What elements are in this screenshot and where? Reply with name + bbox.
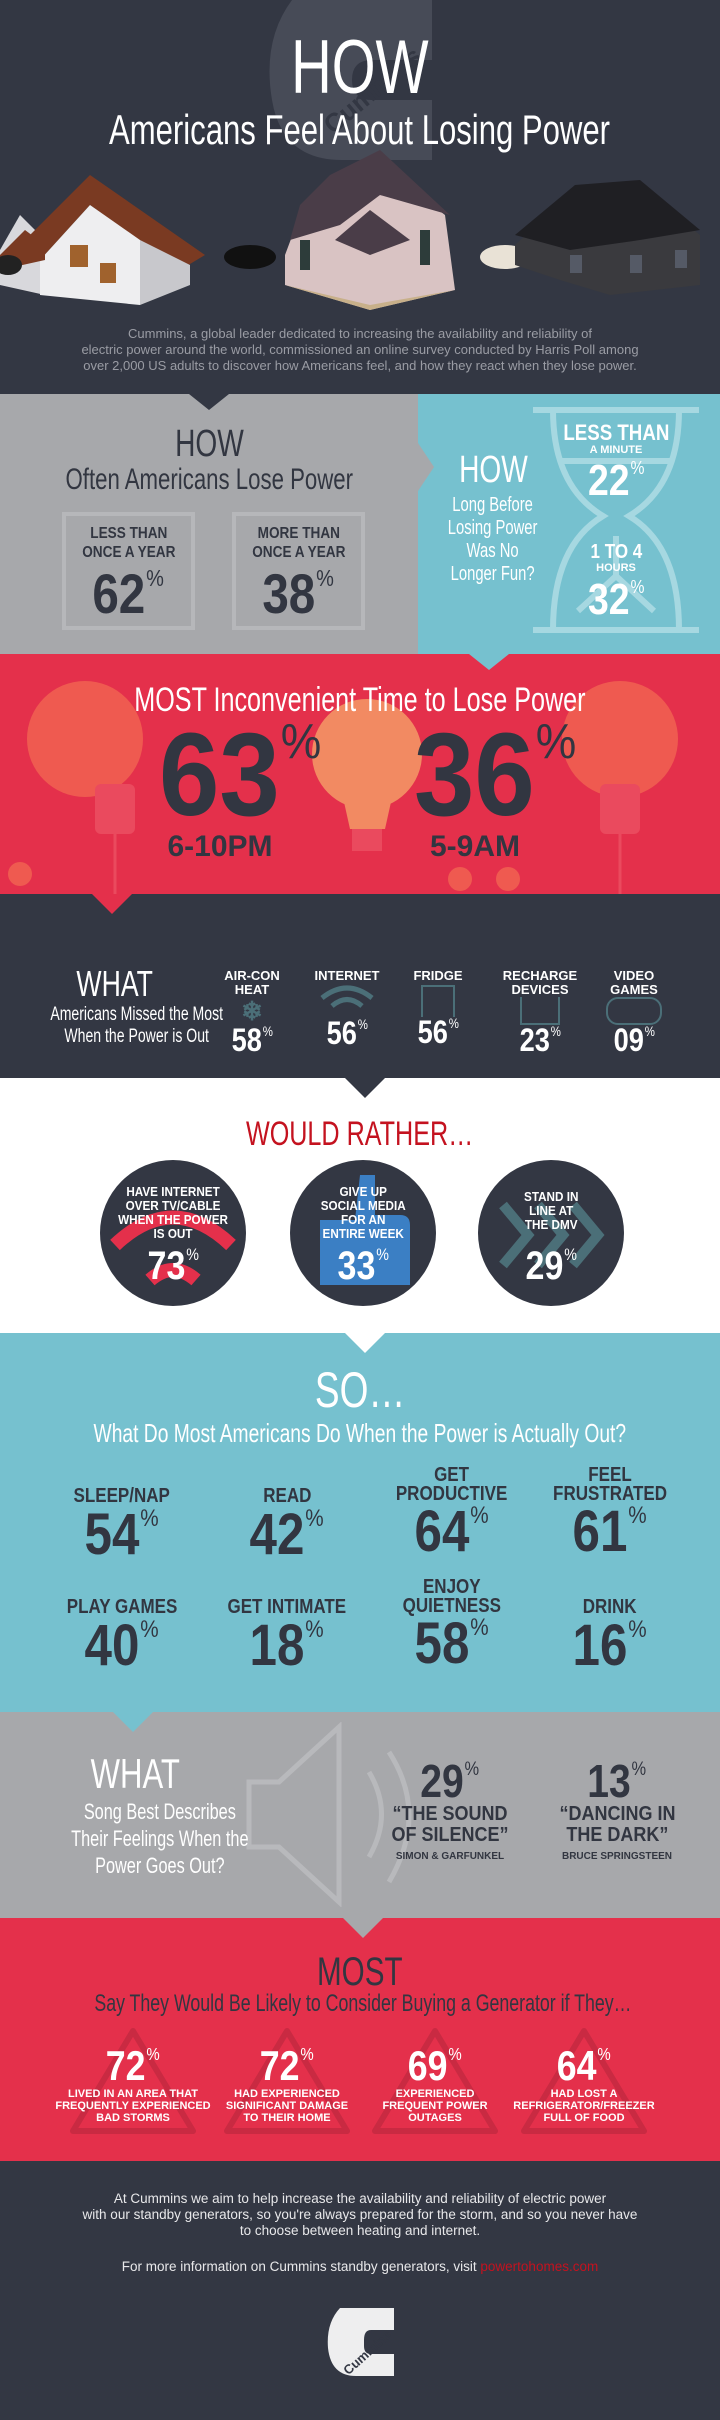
question text: Long Before xyxy=(453,494,533,516)
stat: sleep/nap: SLEEP/NAP xyxy=(74,1485,170,1507)
calendar: less than once a year: ONCE A YEAR xyxy=(82,544,175,561)
stat: get intimate: 18% xyxy=(250,1613,324,1678)
stat: read: READ xyxy=(263,1485,311,1507)
stat: sleep/nap: 54% xyxy=(85,1502,159,1567)
closing paragraph: with our standby generators, so you're always prepared for the storm, and so you never have xyxy=(83,2207,637,2222)
stat: play games: PLAY GAMES xyxy=(67,1596,177,1618)
stat: feel frustrated xyxy=(553,1464,667,1564)
item: video games xyxy=(606,968,662,1058)
subheading: Say They Would Be Likely to Consider Buying a Generator if They… xyxy=(94,1990,631,2017)
subheading: Americans Missed the Most xyxy=(50,1004,223,1025)
circle: stand in line at dmv: LINE AT xyxy=(529,1203,573,1218)
question text: Was No xyxy=(467,540,519,562)
calendar: more than once a year xyxy=(232,512,365,630)
panel: would rather xyxy=(0,1078,720,1333)
question text: Their Feelings When the xyxy=(71,1826,249,1851)
arrow: gray into red xyxy=(343,1918,383,1938)
item: fridge: 56% xyxy=(417,1014,459,1050)
warning triangles xyxy=(0,2026,720,2136)
arrow: teal into red xyxy=(469,654,509,670)
calendar: more than once a year: MORE THAN xyxy=(257,525,340,542)
circle: give up social media: SOCIAL MEDIA xyxy=(321,1198,405,1213)
calendar: more than once a year: 38% xyxy=(263,562,334,625)
item: recharge devices xyxy=(503,968,577,1058)
illustration: houses and cars xyxy=(0,150,700,310)
heading: SO… xyxy=(315,1362,405,1418)
stat: frequent outages: FREQUENT POWER xyxy=(382,2100,488,2112)
panel: most inconvenient time xyxy=(0,654,720,894)
stat: bad storms: 72% xyxy=(106,2042,160,2089)
question text: Power Goes Out? xyxy=(95,1853,225,1878)
circle: internet over tv: IS OUT xyxy=(153,1226,193,1241)
row 1 stats xyxy=(74,1464,667,1567)
circle: give up social media: ENTIRE WEEK xyxy=(322,1226,404,1241)
icon: cummins logo xyxy=(326,2308,398,2378)
stat: get intimate: GET INTIMATE xyxy=(228,1596,346,1618)
item: recharge devices: DEVICES xyxy=(511,982,569,997)
panel: generator xyxy=(0,1918,720,2161)
question text: Longer Fun? xyxy=(451,563,535,585)
item: air-con heat: AIR-CON xyxy=(224,968,280,983)
stat: 1 to 4 hours xyxy=(588,541,644,624)
stat: enjoy quietness: ENJOY xyxy=(423,1576,481,1598)
stat: 1 to 4 hours: HOURS xyxy=(596,562,636,574)
subheading: What Do Most Americans Do When the Power is Actually Out? xyxy=(94,1418,626,1448)
stat: bad storms: LIVED IN AN AREA THAT xyxy=(68,2088,198,2100)
circle: stand in line at dmv: STAND IN xyxy=(524,1189,578,1204)
item: internet: INTERNET xyxy=(314,968,380,983)
stat: frequent outages xyxy=(355,2046,515,2124)
stat: damage to home: 72% xyxy=(260,2042,314,2089)
item: fridge xyxy=(413,968,463,1050)
stat: feel frustrated: 61% xyxy=(573,1499,647,1564)
question text: Losing Power xyxy=(448,517,538,539)
circle: stand in line at dmv xyxy=(478,1160,624,1306)
stat: get intimate xyxy=(228,1596,346,1678)
circle: give up social media xyxy=(290,1160,436,1306)
item: video games: GAMES xyxy=(610,982,658,997)
stat: play games xyxy=(67,1596,177,1678)
stat: 36% 5-9am: 36% xyxy=(414,709,576,841)
stat: play games: 40% xyxy=(85,1613,159,1678)
item: air-con heat xyxy=(224,968,280,1058)
stat: bad storms xyxy=(53,2046,213,2124)
circle: internet over tv: WHEN THE POWER xyxy=(118,1212,228,1227)
subheading: Often Americans Lose Power xyxy=(65,463,353,496)
calendar: less than once a year: 62% xyxy=(93,562,164,625)
stat: dancing in the dark: 13% xyxy=(588,1755,646,1807)
circle: internet over tv: 73% xyxy=(147,1244,199,1288)
icon: speaker xyxy=(246,1722,412,1907)
circle: internet over tv xyxy=(100,1160,246,1306)
calendar: less than once a year xyxy=(62,512,195,630)
intro paragraph xyxy=(81,326,639,373)
stat: damage to home: SIGNIFICANT DAMAGE xyxy=(226,2100,348,2112)
stat: lost food: HAD LOST A xyxy=(551,2088,617,2100)
item: air-con heat: 58% xyxy=(231,1022,273,1058)
stat: damage to home: TO THEIR HOME xyxy=(243,2112,331,2124)
heading: MOST Inconvenient Time to Lose Power xyxy=(134,681,586,719)
item: internet: 56% xyxy=(326,1015,368,1051)
stat: drink: 16% xyxy=(573,1613,647,1678)
stat: get productive: GET xyxy=(435,1464,469,1486)
stat: bad storms: BAD STORMS xyxy=(96,2112,170,2124)
footer xyxy=(0,2161,720,2420)
circle: give up social media: GIVE UP xyxy=(339,1184,387,1199)
stat: less than a minute: 22% xyxy=(588,456,644,505)
question text xyxy=(71,1799,249,1878)
stat: lost food: REFRIGERATOR/FREEZER xyxy=(513,2100,655,2112)
heading: WHAT xyxy=(77,963,153,1004)
stat: lost food xyxy=(504,2046,664,2124)
title: HOW xyxy=(291,25,429,110)
arrow: red into dark xyxy=(92,894,132,914)
circle: internet over tv: HAVE INTERNET xyxy=(126,1184,220,1199)
heading: MOST xyxy=(317,1950,403,1994)
item: internet xyxy=(314,968,380,1051)
item: air-con heat: HEAT xyxy=(235,982,269,997)
stat: dancing in the dark xyxy=(527,1760,707,1864)
icon: faded cummins logo watermark xyxy=(270,0,432,160)
stat: enjoy quietness: QUIETNESS xyxy=(403,1595,501,1617)
icon: cummins logo: Cummins xyxy=(340,2327,394,2378)
intro paragraph: electric power around the world, commissioned an online survey conducted by Harris Poll among xyxy=(81,342,639,357)
closing paragraph xyxy=(40,2191,680,2239)
stat: get productive: PRODUCTIVE xyxy=(396,1483,508,1505)
circle: stand in line at dmv: 29% xyxy=(525,1244,577,1288)
stat: lost food: FULL OF FOOD xyxy=(543,2112,625,2124)
stat: 1 to 4 hours: 32% xyxy=(588,575,644,624)
stat: frequent outages: 69% xyxy=(408,2042,462,2089)
arrow: teal into gray xyxy=(113,1712,153,1732)
row 2 stats xyxy=(67,1576,647,1678)
stat: sound of silence: “THE SOUND xyxy=(392,1803,508,1825)
stat: sound of silence: OF SILENCE” xyxy=(391,1824,508,1846)
stat: 36% 5-9am: 5-9AM xyxy=(430,830,520,863)
item: video games: VIDEO xyxy=(614,968,654,983)
subheading: When the Power is Out xyxy=(64,1026,209,1047)
stat: feel frustrated: FEEL xyxy=(588,1464,632,1486)
more info line: For more information on Cummins standby generators, visit powertohomes.com xyxy=(122,2259,598,2274)
stat: damage to home: HAD EXPERIENCED xyxy=(234,2088,340,2100)
stat: lost food: 64% xyxy=(557,2042,611,2089)
stat: dancing in the dark: “DANCING IN xyxy=(559,1803,675,1825)
arrow: dark into white xyxy=(345,1078,385,1098)
circle: give up social media: 33% xyxy=(337,1244,389,1288)
stat: frequent outages: OUTAGES xyxy=(408,2112,462,2124)
closing paragraph: to choose between heating and internet. xyxy=(240,2223,480,2238)
stat: sleep/nap xyxy=(74,1485,170,1567)
icon: hourglass xyxy=(533,407,699,633)
stat: get productive: 64% xyxy=(415,1499,489,1564)
stat: sound of silence: SIMON & GARFUNKEL xyxy=(396,1851,504,1862)
stat: less than a minute: A MINUTE xyxy=(590,444,642,456)
calendar: more than once a year: ONCE A YEAR xyxy=(252,544,345,561)
item: video games: 09% xyxy=(613,1022,655,1058)
circle: give up social media: FOR AN xyxy=(341,1212,385,1227)
item: recharge devices: RECHARGE xyxy=(503,968,577,983)
panel: how often xyxy=(0,394,418,654)
circle: internet over tv: OVER TV/CABLE xyxy=(126,1198,220,1213)
subtitle: Americans Feel About Losing Power xyxy=(109,106,611,153)
stat: read: 42% xyxy=(250,1502,324,1567)
question text: Song Best Describes xyxy=(84,1799,236,1824)
circle: stand in line at dmv: THE DMV xyxy=(525,1217,577,1232)
heading: HOW xyxy=(175,423,243,465)
subheading xyxy=(50,1004,223,1047)
calendar: less than once a year: LESS THAN xyxy=(90,525,167,542)
stat: enjoy quietness xyxy=(403,1576,501,1676)
intro paragraph: over 2,000 US adults to discover how Americans feel, and how they react when they lose power. xyxy=(83,358,637,373)
stat: damage to home xyxy=(207,2046,367,2124)
item: air-con heat: ❄ xyxy=(241,996,263,1026)
header section xyxy=(0,0,720,394)
arrow: dark into gray xyxy=(189,394,229,410)
stat: less than a minute: LESS THAN xyxy=(563,420,669,445)
stat: get productive xyxy=(396,1464,508,1564)
arrow: gray into teal xyxy=(418,443,434,491)
stat: sound of silence xyxy=(391,1755,508,1862)
item: recharge devices: 23% xyxy=(519,1022,561,1058)
stat: 63% 6-10pm: 6-10PM xyxy=(167,830,273,863)
background decorations: bulbs and plugs xyxy=(8,681,678,894)
icon: faded cummins logo watermark: Cummins xyxy=(318,41,428,140)
heading: HOW xyxy=(459,449,527,491)
closing paragraph: At Cummins we aim to help increase the availability and reliability of electric power xyxy=(114,2191,606,2206)
stat: frequent outages: EXPERIENCED xyxy=(396,2088,474,2100)
stat: sound of silence: 29% xyxy=(421,1755,479,1807)
panel: how long before no fun xyxy=(418,394,720,654)
stat: dancing in the dark: THE DARK” xyxy=(566,1824,668,1846)
stat: enjoy quietness: 58% xyxy=(415,1611,489,1676)
heading: WOULD RATHER… xyxy=(246,1115,474,1153)
stat: feel frustrated: FRUSTRATED xyxy=(553,1483,667,1505)
stat: bad storms: FREQUENTLY EXPERIENCED xyxy=(55,2100,211,2112)
stat: 63% 6-10pm: 63% xyxy=(159,709,321,841)
arrow: white into teal xyxy=(345,1333,385,1353)
stat: drink: DRINK xyxy=(583,1596,637,1618)
stat: dancing in the dark: BRUCE SPRINGSTEEN xyxy=(562,1851,672,1862)
panel: so what do americans do xyxy=(0,1333,720,1712)
intro paragraph: Cummins, a global leader dedicated to increasing the availability and reliability of xyxy=(128,326,592,341)
panel: what americans missed xyxy=(0,894,720,1078)
heading: WHAT xyxy=(90,1750,180,1797)
item: fridge: FRIDGE xyxy=(413,968,463,983)
question text xyxy=(448,494,538,585)
panel: what song xyxy=(0,1712,720,1918)
stat: 1 to 4 hours: 1 TO 4 xyxy=(590,541,642,563)
stat: less than a minute xyxy=(563,420,669,505)
